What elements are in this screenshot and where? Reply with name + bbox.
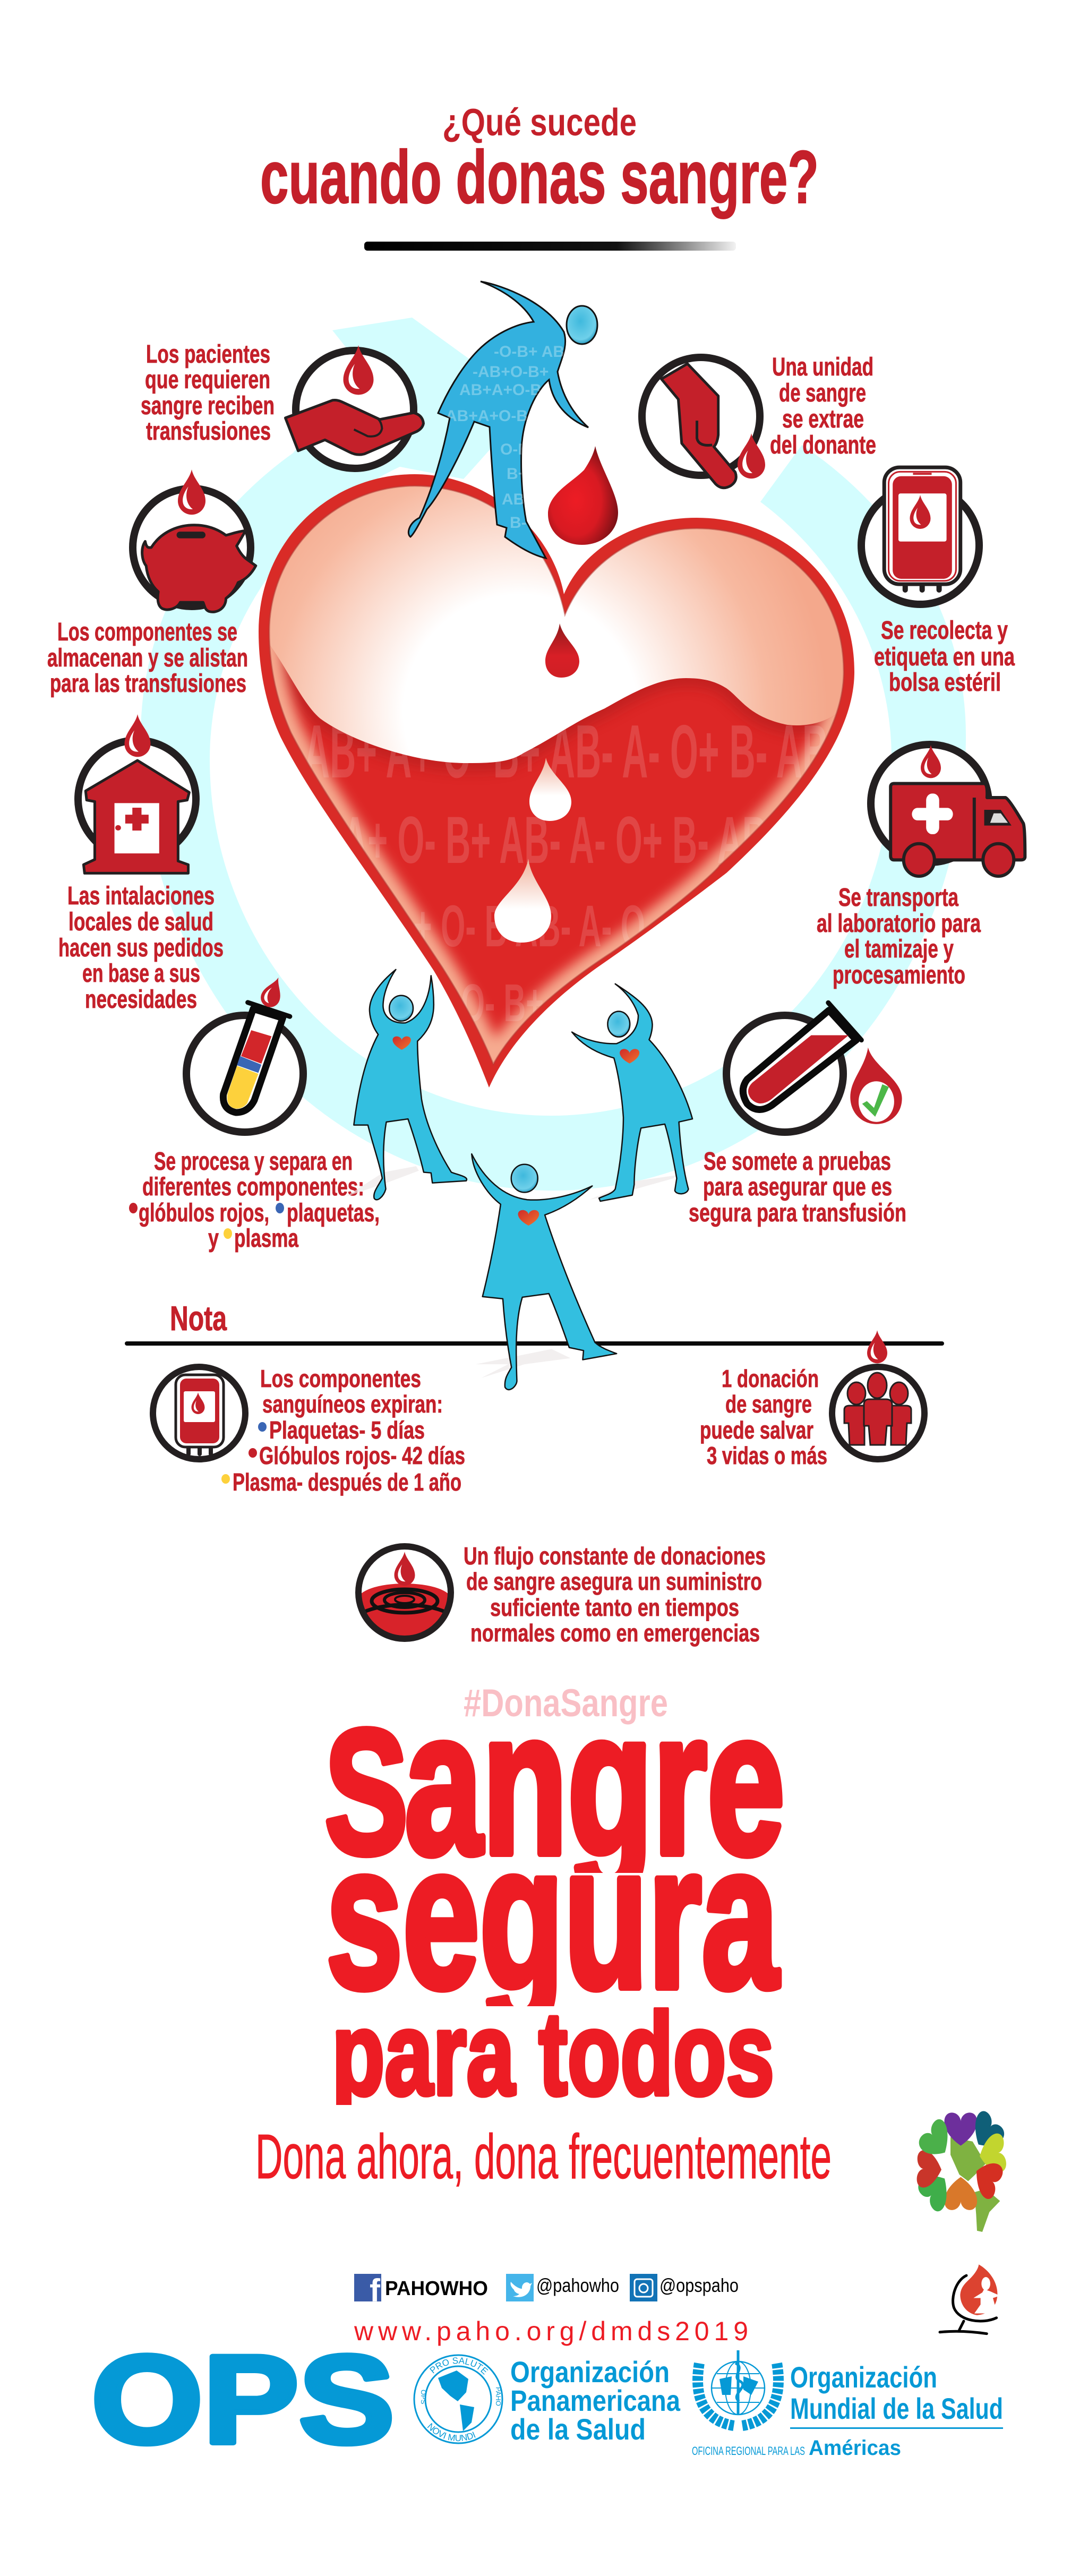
figure shadows [346,1166,676,1378]
text: components stored: almacenan y se alistan [47,644,248,672]
text: transported to lab: procesamiento [833,961,965,989]
social media row [354,2273,739,2308]
text: steady flow: suficiente tanto en tiempos [490,1594,739,1621]
figure left [354,970,467,1200]
circular arrow ring [141,318,966,1191]
instagram [630,2274,739,2301]
text: components stored: para las transfusiones [50,670,246,698]
title: cuando donas sangre? [260,135,819,219]
title: ¿Qué sucede [442,101,637,144]
text: tested [689,1148,906,1227]
figure right [572,984,692,1201]
text: transported to lab: el tamizaje y [844,935,954,963]
icon: small blood bag [153,1367,245,1459]
blood type letters: + O- B AB- A- O [414,894,645,959]
text: steady flow [464,1542,766,1647]
donor figure: O-B [500,441,529,458]
text: patients: Los pacientes [146,340,270,369]
slogan line: Sangre: S [324,1692,408,1891]
figure center [472,1154,616,1390]
text: processing: plaquetas, [287,1199,380,1227]
text: unit drawn: se extrae [782,405,864,433]
donor figure: B+ [507,465,527,483]
icon: testing tube with check drop [726,1003,902,1132]
slogan line: Sangre [326,1726,783,1873]
icon: hands giving blood [285,345,423,468]
facebook [354,2273,488,2308]
text: patients [141,340,275,446]
icon: arm donating [642,357,765,488]
text: unit drawn: de sangre [779,379,866,407]
WHO emblem [698,2350,778,2426]
slogan line: para todos: para todos [332,1988,774,2120]
PAHO seal: NOVI MUNDI [427,2423,476,2442]
slogan line: segura: segura [326,1802,779,2032]
twitter [506,2274,619,2301]
PAHO name: Panamericana [510,2384,681,2417]
donor head [567,306,597,344]
text: component expiry: Glóbulos rojos- 42 días [259,1442,465,1469]
text: patients: sangre reciben [141,392,275,420]
text: health facilities [58,882,224,1014]
facebook: f [370,2273,381,2308]
PAHO name: de la Salud [510,2412,646,2446]
text: processing [129,1148,380,1253]
text: collected and labeled [874,617,1015,697]
title [260,101,819,219]
text: patients: transfusiones [146,417,271,446]
text: processing: plasma [234,1225,298,1253]
website url: www.paho.org/dmds2019 [354,2316,748,2346]
text: components stored: Los componentes se [57,618,237,646]
recipients figures [346,970,692,1390]
blood fill [270,645,836,1052]
donor figure: -O-B+ AB-A- [494,343,587,361]
text: health facilities: necesidades [85,986,197,1014]
slogan [326,1726,783,2105]
text: collected and labeled: etiqueta en una [874,643,1015,671]
logo: hearts over the Americas [915,2108,1007,2232]
note divider [125,1341,944,1346]
icon: transport truck [871,744,1025,876]
PAHO seal: PRO SALUTE [430,2357,489,2375]
white drop upper [529,758,571,821]
text: component expiry: Los componentes [260,1365,421,1392]
slogan line: Sangre: angre [405,1668,785,1898]
logo: world blood donor day [940,2264,1000,2334]
donor figure [408,281,597,558]
text: lives saved: de sangre [725,1390,812,1418]
icon: separated test tube [186,974,303,1132]
blood type letters: O- B+ [461,973,544,1033]
white drop lower [494,859,551,943]
text: processing: y [208,1225,219,1253]
title divider brush stroke [364,242,736,251]
PAHO name: Organización [510,2355,670,2389]
donor figure: AB+A+O-B [459,381,542,399]
PAHO name [510,2355,681,2446]
text: steady flow: Un flujo constante de donaciones [464,1542,766,1570]
icon: health facility [78,714,196,873]
WHO name: Mundial de la Salud [790,2392,1003,2425]
text: health facilities: Las intalaciones [67,882,215,910]
text: tested: segura para transfusión [689,1199,906,1227]
text: lives saved: 3 vidas o más [707,1442,827,1469]
PAHO seal: OPS [419,2390,427,2404]
text: collected and labeled: bolsa estéril [889,669,1001,697]
icon: blood bag [861,467,979,604]
WHO name: Américas [809,2436,901,2460]
donor figure: AB-A [502,491,542,508]
icon: ripple of blood [355,1543,454,1642]
text: component expiry: sanguíneos expiran: [262,1390,443,1418]
falling drop large [548,446,618,545]
heart [255,474,871,1115]
instagram: @opspaho [659,2274,739,2296]
text: lives saved: 1 donación [722,1365,819,1392]
twitter: @pahowho [536,2274,619,2296]
donor figure: -AB+O-B+ [473,363,549,381]
donor figure: B- [510,514,527,532]
WHO name [692,2360,1003,2460]
text: collected and labeled: Se recolecta y [881,617,1008,645]
text: unit drawn: del donante [770,431,876,459]
WHO name: OFICINA REGIONAL PARA LAS [692,2444,805,2458]
facebook: PAHOWHO [385,2278,488,2300]
check drop [850,1047,902,1124]
text: component expiry: Plaquetas- 5 días [269,1416,425,1444]
text: processing: Se procesa y separa en [154,1148,353,1176]
text: component expiry: Plasma- después de 1 año [233,1468,461,1496]
text: health facilities: en base a sus [82,960,200,988]
text: health facilities: locales de salud [68,908,213,936]
text: components stored [47,618,248,698]
text: lives saved [700,1365,827,1469]
text: processing: diferentes componentes: [142,1173,364,1201]
text: processing: glóbulos rojos, [139,1199,269,1227]
WHO name: Organización [790,2360,937,2394]
text: component expiry [221,1365,465,1496]
text: transported to lab: Se transporta [838,884,958,912]
hashtag: #DonaSangre [464,1682,668,1725]
text: unit drawn: Una unidad [772,353,873,381]
text: patients: que requieren [145,366,270,394]
text: steady flow: de sangre asegura un suministro [466,1568,762,1595]
text: steady flow: normales como en emergencias [470,1619,760,1647]
OPS logotype: OPS [91,2330,395,2470]
text: lives saved: puede salvar [700,1416,813,1444]
text: tested: para asegurar que es [703,1173,892,1201]
note heading: Nota [170,1299,227,1338]
text: transported to lab: al laboratorio para [817,910,981,938]
blood type letters [304,709,828,1033]
PAHO seal [413,2355,503,2444]
donor figure: AB+A+O-B+A [446,407,549,425]
icon: piggy bank [133,469,256,612]
text: transported to lab [817,884,981,989]
PAHO seal: PAHO [494,2387,502,2406]
icon: three people [832,1330,924,1459]
text: unit drawn [770,353,876,459]
text: tested: Se somete a pruebas [704,1148,891,1176]
falling drop small [545,623,579,678]
text: health facilities: hacen sus pedidos [58,934,224,962]
